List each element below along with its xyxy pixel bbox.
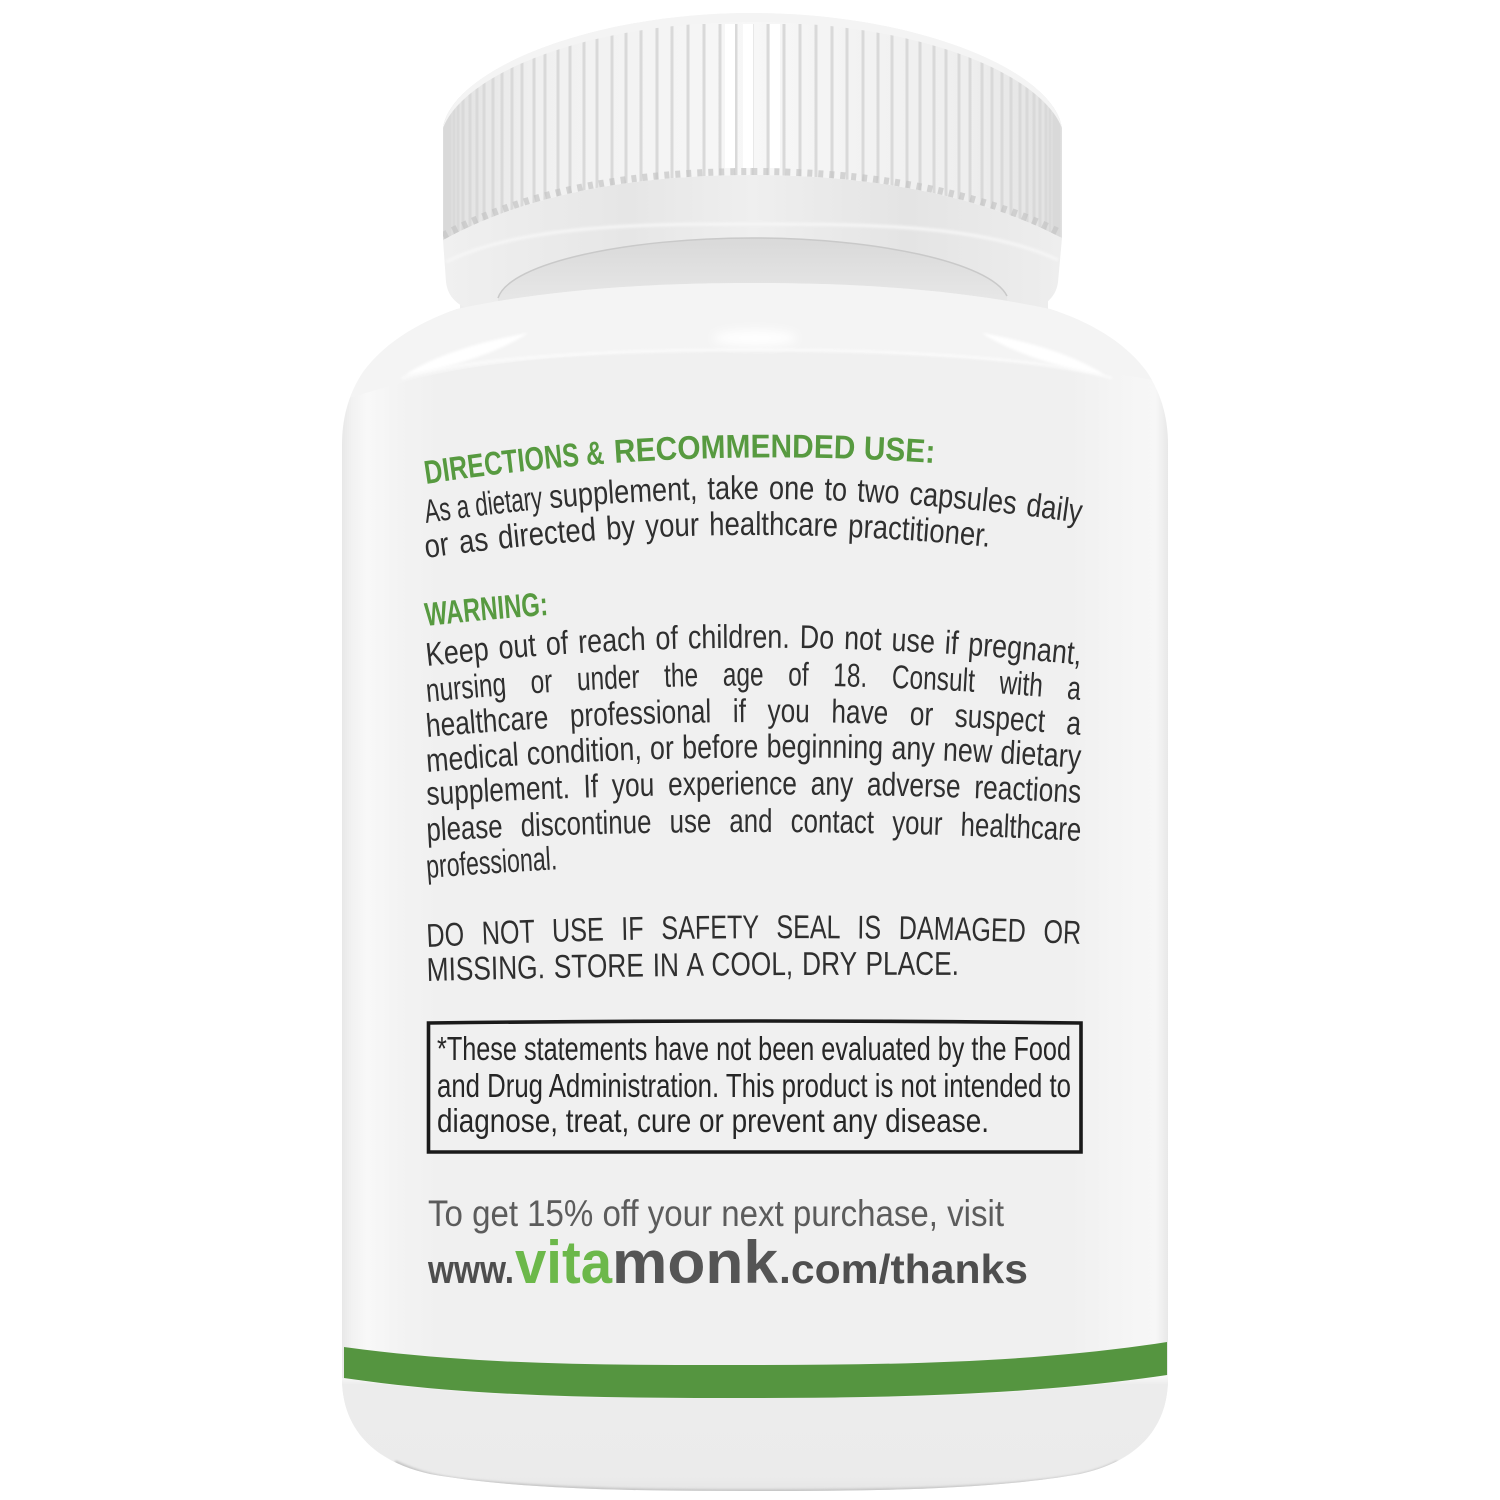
text: warning: nursing or under the age of 18. Consult with a xyxy=(427,662,1080,702)
text: warning: Keep out of reach of children. Do not use if pregnant, xyxy=(426,624,1079,669)
text: warning: healthcare professional if you have or suspect a xyxy=(426,698,1080,737)
website url: .com/thanks xyxy=(779,1246,1028,1292)
cap collar ring xyxy=(443,175,1062,320)
green label band xyxy=(344,1342,1167,1398)
text: warning: medical condition, or before beginning any new dietary xyxy=(427,734,1082,774)
FDA disclaimer box xyxy=(428,1021,1081,1152)
text: directions: As a dietary xyxy=(426,490,542,523)
text: directions: or as directed by your healthcare practitioner. xyxy=(426,511,988,558)
text: safety seal notice: DO NOT USE IF SAFETY SEAL IS DAMAGED OR xyxy=(428,915,1080,947)
FDA disclaimer box: *These statements have not been evaluated by the Food xyxy=(437,1030,1071,1067)
supplement bottle illustration xyxy=(342,13,1168,1491)
text: warning xyxy=(426,624,1082,885)
heading: directions: RECOMMENDED USE: xyxy=(615,434,933,463)
text: directions: supplement, take one to two capsules daily xyxy=(550,475,1083,528)
heading: warning: WARNING: xyxy=(424,593,546,626)
text: directions xyxy=(426,475,1083,558)
FDA disclaimer box: diagnose, treat, cure or prevent any disease. xyxy=(437,1102,989,1139)
website url: vita xyxy=(515,1229,613,1296)
website url: monk xyxy=(612,1229,779,1296)
heading: directions xyxy=(424,434,933,484)
text: warning: please discontinue use and contact your healthcare xyxy=(428,808,1080,848)
text: safety seal notice: MISSING. STORE IN A COOL, DRY PLACE. xyxy=(428,952,957,981)
bottle neck xyxy=(460,280,1048,320)
website url: www. xyxy=(427,1248,514,1292)
text: warning: supplement. If you experience any adverse reactions xyxy=(428,770,1080,810)
website url xyxy=(427,1229,1028,1296)
heading: directions: DIRECTIONS & xyxy=(424,442,604,484)
screw cap with ribs xyxy=(443,13,1062,240)
text: safety seal notice xyxy=(428,915,1080,981)
discount offer text: To get 15% off your next purchase, visit xyxy=(428,1193,1005,1234)
text: warning: professional. xyxy=(427,846,556,885)
FDA disclaimer box: and Drug Administration. This product is not intended to xyxy=(437,1067,1071,1104)
bottle body xyxy=(342,283,1168,1495)
